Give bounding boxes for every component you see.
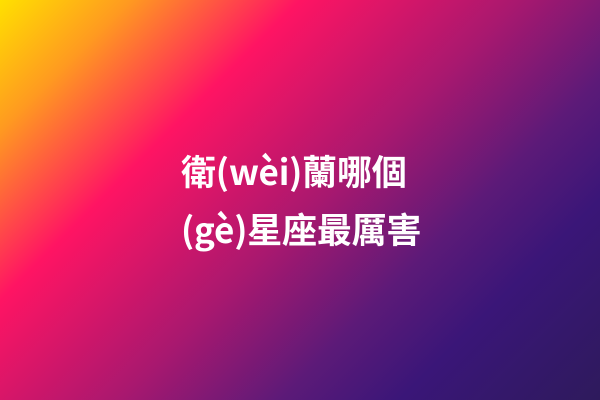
title: (gè)星座最厲害 bbox=[181, 203, 421, 254]
title: 衛(wèi)蘭哪個 bbox=[181, 145, 407, 196]
title bbox=[181, 145, 421, 254]
